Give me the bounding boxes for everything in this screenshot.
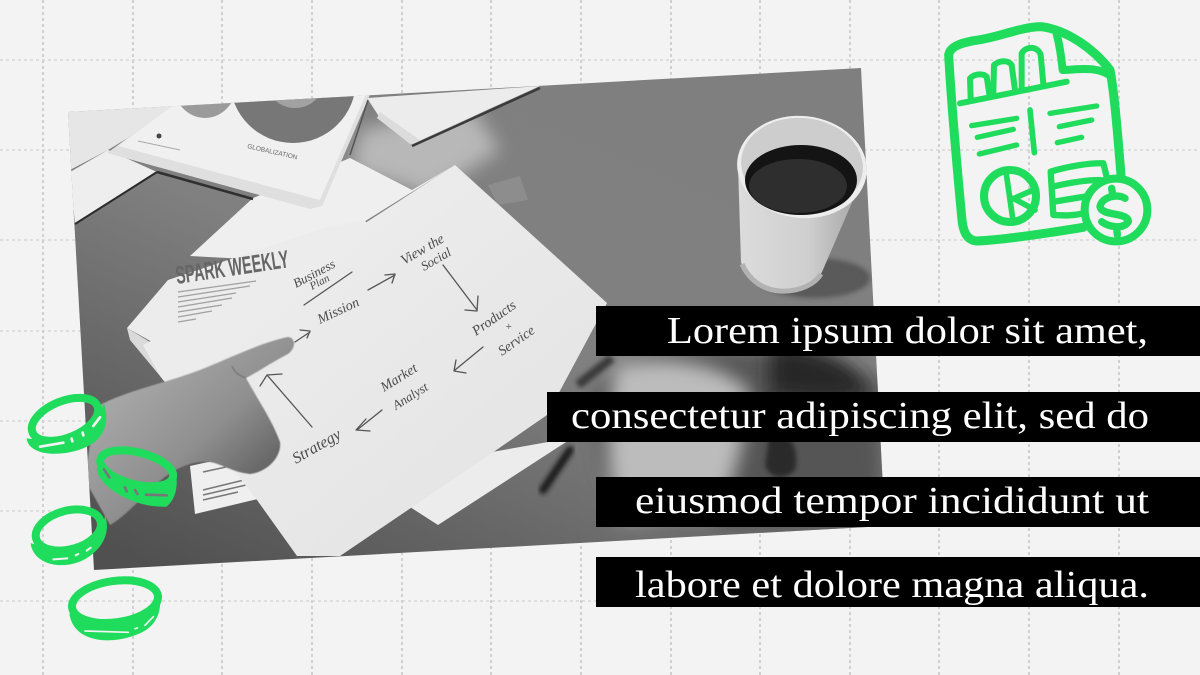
coin 1 <box>26 389 106 454</box>
pie chart <box>984 170 1036 222</box>
handwritten labels: Market <box>377 361 421 396</box>
coin 3 <box>31 503 107 565</box>
newsletter sheet <box>127 221 366 341</box>
text band 1 <box>596 306 1200 356</box>
handwritten labels: View the <box>399 232 447 268</box>
photo: desk with business plan sketch and coffee <box>68 68 882 570</box>
desk surface <box>60 60 900 580</box>
hand-drawn flow diagram <box>260 265 483 431</box>
handwritten labels: Social <box>418 244 454 274</box>
coin 4 <box>69 575 161 640</box>
handwritten labels: Products <box>469 298 520 340</box>
scattered papers top left <box>68 86 540 258</box>
coffee cup <box>732 109 872 298</box>
icon: green coins <box>26 389 177 640</box>
bar chart <box>960 48 1067 103</box>
handwritten labels: Service <box>496 323 538 359</box>
text band 2: consectetur adipiscing elit, sed do <box>571 395 1149 437</box>
business card <box>190 462 256 514</box>
donut chart on report <box>234 96 354 143</box>
handwritten labels: Strategy <box>290 426 345 467</box>
text band 4 <box>596 557 1200 607</box>
text band 3 <box>596 477 1200 527</box>
icon: financial report document with dollar coin <box>949 27 1147 241</box>
dollar coin <box>1085 179 1147 241</box>
text lines <box>972 106 1097 154</box>
pointing hand <box>85 337 294 525</box>
text band 1: Lorem ipsum dolor sit amet, <box>667 310 1148 352</box>
newsletter headline: SPARK WEEKLY <box>174 245 291 290</box>
stacked list <box>1051 163 1107 215</box>
handwritten labels: + <box>505 321 512 333</box>
handwritten labels: Business <box>290 256 338 291</box>
lower paper layers <box>411 442 566 525</box>
text band 3: eiusmod tempor incididunt ut <box>635 480 1150 522</box>
text band 4: labore et dolore magna aliqua. <box>635 564 1149 606</box>
report label: GLOBALIZATION <box>247 143 298 162</box>
handwritten labels: Analyst <box>389 379 431 413</box>
text band 2 <box>547 392 1200 442</box>
document outline <box>949 27 1121 241</box>
handwritten labels: Mission <box>314 295 362 328</box>
blurred writing hand <box>543 345 885 530</box>
folded corner <box>1057 34 1112 77</box>
handwritten labels: Plan <box>307 272 332 293</box>
newsletter body lines <box>178 281 256 322</box>
coin 2 <box>97 444 177 507</box>
stripe sheet behind <box>488 176 528 205</box>
handwritten labels <box>290 232 538 467</box>
pen <box>543 450 570 490</box>
main sketch sheet <box>143 165 607 556</box>
